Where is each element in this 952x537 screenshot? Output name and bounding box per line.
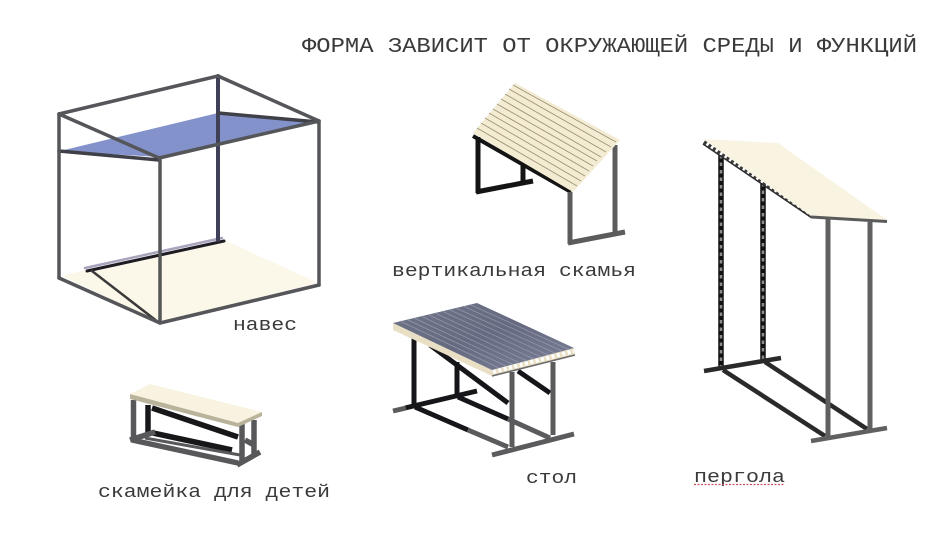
label: vertical bench: вертикальная скамья bbox=[392, 262, 636, 282]
illustration: canopy bbox=[59, 76, 319, 323]
canopy floor back bar bbox=[85, 238, 224, 322]
pergola slat ends bbox=[703, 142, 812, 218]
label: canopy: навес bbox=[233, 316, 297, 336]
children's bench seat bbox=[130, 384, 262, 423]
pergola top bbox=[703, 139, 887, 220]
table top edge bbox=[393, 323, 575, 376]
table front end slats bbox=[493, 351, 574, 372]
label: table: стол bbox=[526, 469, 577, 489]
bench slatted top bbox=[473, 83, 620, 192]
pergola front frame bbox=[811, 218, 887, 441]
bench front frame bbox=[568, 145, 625, 244]
canopy frame bbox=[59, 76, 319, 323]
table gray frame bbox=[393, 362, 574, 455]
label: children's bench: скамейка для детей bbox=[98, 483, 330, 503]
illustration: pergola bbox=[703, 139, 887, 441]
pergola rear posts bbox=[721, 155, 763, 367]
illustration: vertical bench bbox=[473, 83, 625, 244]
children's bench dark braces bbox=[148, 405, 238, 450]
table top bbox=[393, 303, 574, 370]
spell-check underline bbox=[694, 484, 785, 486]
canopy floor bbox=[62, 240, 318, 322]
illustration: table bbox=[393, 303, 575, 455]
bench rear frame bbox=[473, 136, 571, 193]
children's bench seat edge bbox=[130, 394, 262, 427]
canopy blue roof panel bbox=[60, 113, 318, 157]
pergola base rails bbox=[704, 358, 867, 436]
title: ФОРМА ЗАВИСИТ ОТ ОКРУЖАЮЩЕЙ СРЕДЫ И ФУНКЦИЙ bbox=[302, 35, 917, 59]
canopy back post bbox=[216, 76, 220, 240]
pergola front edge bbox=[811, 217, 887, 222]
table rear frame bbox=[405, 338, 550, 430]
label: pergola: пергола bbox=[694, 468, 785, 488]
illustration: children's bench bbox=[130, 384, 262, 465]
children's bench frame bbox=[130, 400, 260, 465]
